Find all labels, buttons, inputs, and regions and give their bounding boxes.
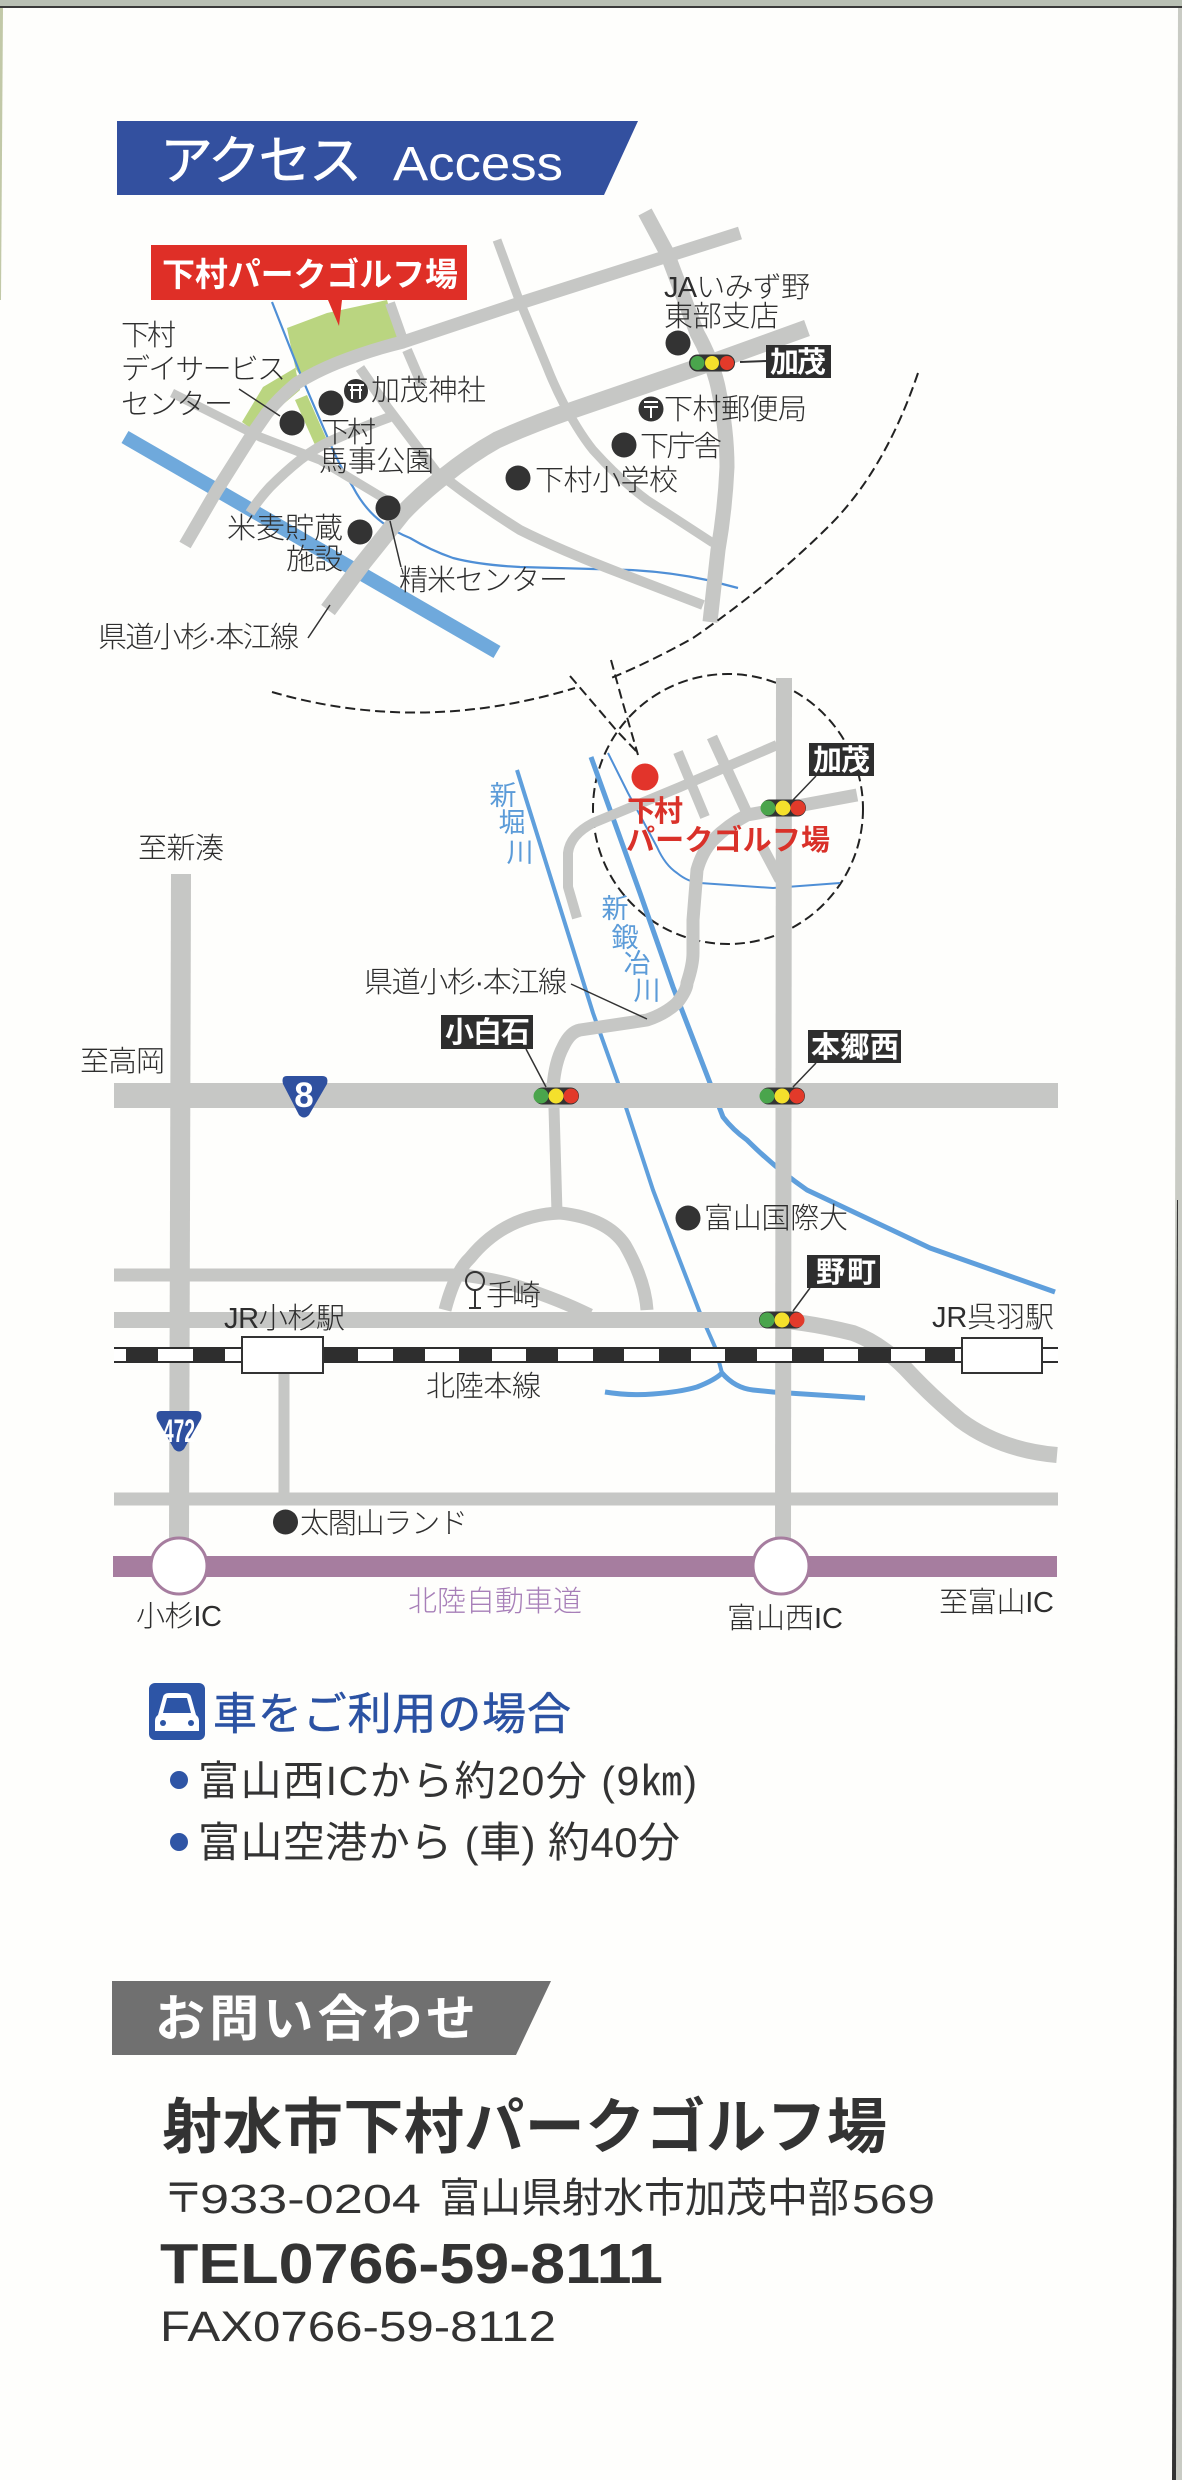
- map labels: 加茂神社: [371, 374, 486, 407]
- label: Kamo: 加茂: [770, 346, 826, 379]
- map labels: JR小杉駅: [224, 1302, 345, 1335]
- map labels: 県道小杉·本江線: [364, 966, 567, 999]
- map labels: 下村小学校: [535, 464, 678, 497]
- landmarks dots: [280, 330, 690, 544]
- river names: 冶: [624, 949, 650, 979]
- address: 569: [852, 2176, 935, 2222]
- station: JR Kosugi: [242, 1337, 323, 1373]
- list: driving times: 富山西ICから約20分 (9㎞): [198, 1758, 697, 1804]
- river names: 新: [490, 781, 516, 811]
- list: driving times: [170, 1758, 697, 1866]
- map labels: 手崎: [486, 1279, 541, 1312]
- icon: route 472 shield: [156, 1411, 201, 1452]
- zoom indicator: dashed arcs: [272, 373, 918, 944]
- map labels: 北陸本線: [426, 1370, 541, 1403]
- roads: [114, 678, 1058, 1540]
- river names: 新: [602, 894, 628, 924]
- map labels: 至新湊: [138, 832, 224, 865]
- river names: 堀: [498, 808, 526, 838]
- map: wide area map: [80, 678, 1058, 1635]
- railway line: Hokuriku: [114, 1347, 1058, 1363]
- map labels: 北陸自動車道: [408, 1585, 582, 1618]
- heading: Access banner: [117, 121, 638, 195]
- address: [163, 2175, 935, 2222]
- contact details: [160, 2094, 935, 2351]
- park area: [242, 300, 398, 445]
- map labels: デイサービス: [121, 353, 286, 386]
- map labels: 太閤山ランド: [300, 1507, 468, 1540]
- map labels: 県道小杉·本江線: [98, 621, 299, 654]
- icon: route 8 shield: [282, 1076, 327, 1118]
- icon: route 472 shield: 472: [163, 1413, 195, 1449]
- traffic light: Kamo: [689, 354, 767, 372]
- red location marker: [632, 764, 658, 790]
- map labels: 至富山IC: [939, 1586, 1054, 1619]
- map labels: JAいみず野: [664, 272, 810, 304]
- map labels: 下村郵便局: [664, 393, 807, 426]
- river names: 川: [506, 838, 534, 868]
- fax: FAX0766-59-8112: [160, 2303, 556, 2351]
- map labels: 下村: [321, 416, 376, 449]
- label: park golf red: [626, 795, 830, 857]
- station: JR Kureha: [962, 1338, 1042, 1373]
- heading: by car: 車をご利用の場合: [213, 1690, 571, 1739]
- icon: post office: [638, 396, 664, 422]
- label: Hongonishi: 本郷西: [811, 1031, 899, 1064]
- label: park golf red: 下村: [627, 795, 683, 828]
- map labels: 富山国際大: [704, 1202, 848, 1235]
- icon: Tezaki pin: [466, 1272, 484, 1308]
- stream: [272, 302, 738, 588]
- map labels: センター: [121, 389, 233, 421]
- icon: shrine: [344, 379, 368, 403]
- map labels: 米麦貯蔵: [227, 512, 343, 545]
- map labels: JR呉羽駅: [932, 1302, 1054, 1334]
- map labels: [80, 832, 1054, 1635]
- telephone: TEL0766-59-8111: [160, 2232, 663, 2296]
- map labels: 施設: [286, 543, 343, 576]
- map labels: 下村: [121, 319, 176, 352]
- map labels: 東部支店: [664, 300, 779, 333]
- label: park golf red: パークゴルフ場: [626, 823, 830, 857]
- address: 933-0204: [200, 2176, 421, 2222]
- landmark dots: [273, 1206, 700, 1534]
- list: driving times: 富山空港から (車) 約40分: [198, 1819, 680, 1866]
- label: Nomachi: 野町: [816, 1257, 876, 1289]
- leader lines: [239, 389, 401, 638]
- map labels: 至高岡: [80, 1046, 165, 1078]
- roads: [172, 212, 807, 622]
- heading: contact banner: お問い合わせ: [155, 1991, 476, 2047]
- map labels: 下庁舎: [640, 431, 722, 463]
- heading: Access banner: アクセス: [160, 132, 362, 191]
- map labels: [98, 272, 810, 654]
- callout: park golf name: 下村パークゴルフ場: [162, 256, 458, 293]
- leader lines: [526, 776, 816, 1311]
- map labels: 小杉IC: [136, 1600, 222, 1633]
- facility name: 射水市下村パークゴルフ場: [162, 2094, 887, 2161]
- map labels: 精米センター: [399, 564, 568, 597]
- label: Kamo intersection: 加茂: [813, 744, 870, 777]
- map: detailed area map: [98, 212, 831, 654]
- river names: 鍛: [612, 923, 638, 953]
- rivers: [517, 753, 1055, 1398]
- label: Koshiroishi: 小白石: [445, 1016, 530, 1049]
- callout: park golf name: [151, 245, 467, 326]
- traffic lights: [534, 800, 806, 1328]
- icon: car: [149, 1683, 205, 1740]
- map labels: 富山西IC: [727, 1602, 843, 1635]
- expressway: [113, 1538, 1057, 1594]
- river names: 川: [634, 976, 660, 1006]
- river thick: [125, 437, 497, 652]
- map labels: 馬事公園: [319, 445, 434, 478]
- heading: contact banner: [112, 1981, 551, 2055]
- icon: route 8 shield: 8: [294, 1076, 314, 1115]
- address: 富山県射水市加茂中部: [439, 2175, 849, 2221]
- river names: [490, 781, 660, 1006]
- heading: Access banner: Access: [393, 138, 563, 191]
- address: 〒: [163, 2175, 204, 2221]
